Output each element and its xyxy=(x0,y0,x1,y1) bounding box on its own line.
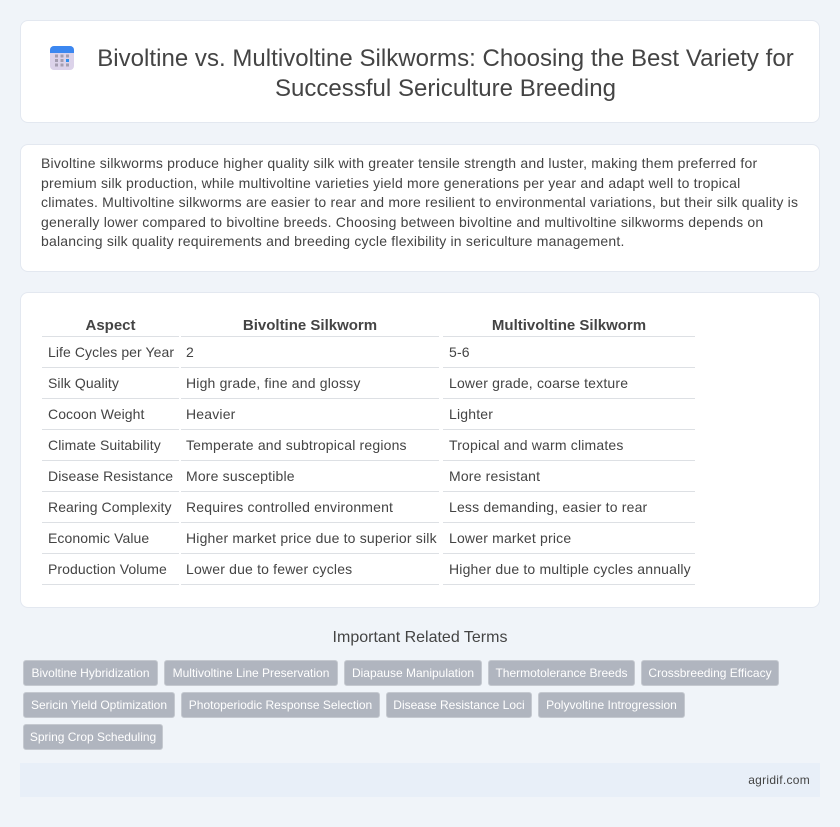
summary paragraph: generally lower compared to bivoltine breeds. Choosing between bivoltine and multivoltine silkworms depends on xyxy=(41,214,763,230)
row: rearing complexity: Rearing Complexity xyxy=(48,499,172,515)
related term tags: Crossbreeding Efficacy xyxy=(648,666,772,680)
row: life cycles xyxy=(48,344,470,360)
related term tags: Multivoltine Line Preservation xyxy=(173,666,329,680)
footer bar xyxy=(20,763,820,797)
row: disease resistance: Disease Resistance xyxy=(48,468,173,484)
row: economic value: Lower market price xyxy=(449,530,571,546)
panel: title header xyxy=(20,20,820,123)
related term tags: Bivoltine Hybridization xyxy=(31,666,150,680)
row: economic value: Economic Value xyxy=(48,530,149,546)
row: climate suitability: Tropical and warm climates xyxy=(449,437,624,453)
row: cocoon weight: Lighter xyxy=(449,406,493,422)
heading: related terms: Important Related Terms xyxy=(333,629,507,646)
summary paragraph: balancing silk quality requirements and breeding cycle flexibility in sericulture management. xyxy=(41,233,625,249)
related term tags: Thermotolerance Breeds xyxy=(495,666,628,680)
related term tags: Disease Resistance Loci xyxy=(393,698,525,712)
related term tags xyxy=(23,660,779,750)
row: production volume: Lower due to fewer cycles xyxy=(186,561,352,577)
row: silk quality: High grade, fine and glossy xyxy=(186,375,361,391)
row: disease resistance: More resistant xyxy=(449,468,540,484)
related term tags: Polyvoltine Introgression xyxy=(546,698,677,712)
row: life cycles: 5-6 xyxy=(449,344,470,360)
row: cocoon weight xyxy=(48,406,493,422)
row: rearing complexity: Less demanding, easier to rear xyxy=(449,499,647,515)
table header: Multivoltine Silkworm xyxy=(492,317,646,334)
table header: Aspect xyxy=(85,317,136,334)
icon: calendar xyxy=(50,46,74,70)
row: disease resistance: More susceptible xyxy=(186,468,295,484)
related term tags: Photoperiodic Response Selection xyxy=(189,698,372,712)
related term tags: Spring Crop Scheduling xyxy=(30,730,156,744)
row: cocoon weight: Cocoon Weight xyxy=(48,406,145,422)
row: disease resistance xyxy=(48,468,540,484)
row: life cycles: Life Cycles per Year xyxy=(48,344,174,360)
row: economic value xyxy=(48,530,571,546)
related term tags: Diapause Manipulation xyxy=(352,666,474,680)
row: rearing complexity xyxy=(48,499,647,515)
row: cocoon weight: Heavier xyxy=(186,406,236,422)
row: climate suitability xyxy=(48,437,624,453)
summary paragraph: premium silk production, while multivoltine varieties yield more generations per year and adapt well to tropical xyxy=(41,175,740,191)
row: production volume: Production Volume xyxy=(48,561,167,577)
row: life cycles: 2 xyxy=(186,344,194,360)
summary paragraph: climates. Multivoltine silkworms are easier to rear and more resilient to environmental variations, but their silk quality is xyxy=(41,194,798,210)
row: silk quality: Silk Quality xyxy=(48,375,119,391)
title: Bivoltine vs. Multivoltine Silkworms: Choosing the Best Variety for Successful Sericulture Breeding xyxy=(97,45,794,102)
summary paragraph xyxy=(41,155,798,249)
row: silk quality xyxy=(48,375,628,391)
footer source label: agridif.com xyxy=(748,773,810,787)
row: production volume xyxy=(48,561,691,577)
row: climate suitability: Temperate and subtropical regions xyxy=(186,437,407,453)
row: climate suitability: Climate Suitability xyxy=(48,437,161,453)
row: rearing complexity: Requires controlled environment xyxy=(186,499,393,515)
row: silk quality: Lower grade, coarse texture xyxy=(449,375,628,391)
table header: Bivoltine Silkworm xyxy=(243,317,377,334)
row: economic value: Higher market price due to superior silk xyxy=(186,530,437,546)
summary paragraph: Bivoltine silkworms produce higher quality silk with greater tensile strength and luster, making them preferred for xyxy=(41,155,757,171)
row: production volume: Higher due to multiple cycles annually xyxy=(449,561,691,577)
related term tags: Sericin Yield Optimization xyxy=(31,698,167,712)
panel: comparison table xyxy=(20,292,820,608)
table header xyxy=(85,317,646,334)
panel: summary text xyxy=(20,144,820,272)
